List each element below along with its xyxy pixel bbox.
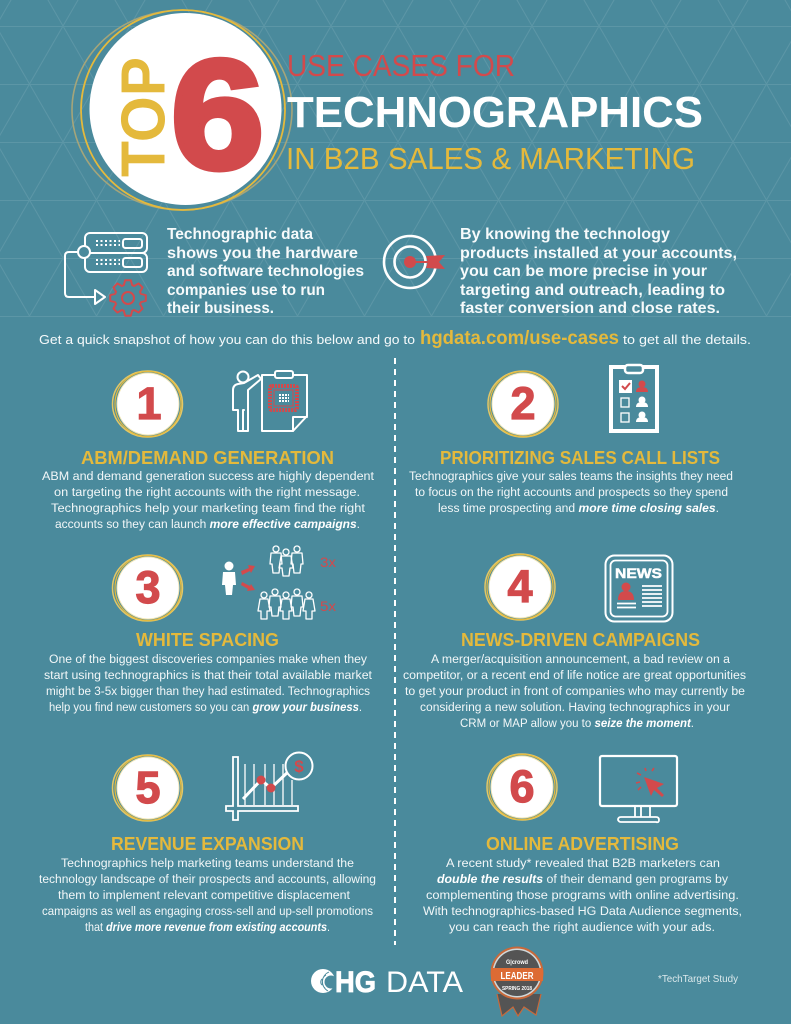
icon: newspaper: NEWS	[615, 565, 662, 581]
title badge: top 6: TOP	[110, 57, 178, 177]
panel: use case 6	[423, 754, 742, 934]
number badge 2: 2	[510, 378, 536, 429]
icon: monitor with cursor	[600, 756, 677, 822]
icon: one person to customer groups: 3x	[320, 554, 336, 570]
logo: HG Data	[311, 966, 463, 999]
number badge 5: 5	[135, 762, 161, 813]
badge: G2 Crowd leader: LEADER	[500, 970, 534, 982]
number badge 2	[488, 371, 558, 437]
number badge 3	[112, 555, 182, 621]
icon: growth chart with dollar	[226, 752, 312, 820]
body text: to get your product in front of companies who may currently be	[405, 684, 745, 698]
heading: REVENUE EXPANSION	[111, 834, 304, 854]
number badge 1	[112, 371, 182, 437]
panel: use case 1	[42, 371, 375, 531]
icon: newspaper	[606, 556, 672, 622]
body text: A merger/acquisition announcement, a bad review on a	[431, 652, 730, 666]
intro text left: companies use to run	[167, 282, 325, 299]
icon: target	[384, 236, 445, 288]
heading: WHITE SPACING	[136, 630, 279, 650]
body text	[39, 856, 376, 934]
intro text right: you can be more precise in your	[460, 263, 707, 280]
body text: on targeting the right accounts with the right message.	[54, 485, 360, 499]
number badge 3: 3	[135, 562, 161, 613]
body text: considering a new solution. Having technographics in your	[420, 700, 730, 714]
title badge: top 6: 6	[171, 28, 264, 201]
body text: Technographics help your marketing team find the right	[51, 501, 366, 515]
body text: double the results of their demand gen programs by	[437, 872, 729, 886]
body text: to focus on the right accounts and prospects so they spend	[415, 485, 728, 499]
panel: use case 3	[44, 546, 373, 714]
snapshot call to action	[39, 328, 751, 349]
intro text right: By knowing the technology	[460, 226, 670, 243]
body text	[403, 652, 746, 730]
heading: ONLINE ADVERTISING	[486, 834, 679, 854]
body text: start using technographics is that their total available market	[44, 668, 373, 682]
intro text left: shows you the hardware	[167, 245, 358, 262]
panel: use case 2	[409, 365, 733, 515]
body text: ABM and demand generation success are highly dependent	[42, 469, 375, 483]
body text: that drive more revenue from existing accounts.	[85, 920, 330, 934]
heading: PRIORITIZING SALES CALL LISTS	[440, 448, 720, 468]
icon: growth chart with dollar: $	[294, 757, 304, 776]
badge: G2 Crowd leader	[490, 946, 544, 1016]
intro text right: products installed at your accounts,	[460, 245, 737, 262]
title text: TECHNOGRAPHICS	[287, 88, 703, 137]
badge: G2 Crowd leader: G|crowd	[506, 960, 528, 966]
icon: clipboard checklist	[611, 365, 657, 431]
snapshot call to action: hgdata.com/use-cases	[420, 328, 619, 349]
intro text right: targeting and outreach, leading to	[460, 282, 725, 299]
heading: ABM/DEMAND GENERATION	[81, 448, 334, 468]
number badge 5	[112, 755, 182, 821]
logo: HG Data: HG	[335, 966, 376, 999]
icon: one person to customer groups	[222, 546, 336, 619]
title badge: top 6	[72, 10, 292, 210]
body text	[423, 856, 742, 934]
body text: competitor, or a recent end of life notice are great opportunities	[403, 668, 746, 682]
snapshot call to action: to get all the details.	[623, 332, 751, 347]
number badge 6	[487, 754, 557, 820]
body text: Technographics help marketing teams understand the	[61, 856, 354, 870]
icon: one person to customer groups: 5x	[320, 598, 336, 614]
heading: NEWS-DRIVEN CAMPAIGNS	[461, 630, 700, 650]
body text: accounts so they can launch more effective campaigns.	[55, 517, 360, 531]
intro text right: faster conversion and close rates.	[460, 300, 720, 317]
number badge 4	[485, 554, 555, 620]
body text	[409, 469, 733, 515]
body text: you can reach the right audience with your ads.	[449, 920, 715, 934]
panel: use case 5	[39, 752, 376, 934]
number badge 6: 6	[509, 761, 535, 812]
intro text right	[460, 226, 737, 317]
number badge 4: 4	[507, 561, 533, 612]
intro text left: and software technologies	[167, 263, 364, 280]
body text: Technographics give your sales teams the insights they need	[409, 469, 733, 483]
body text: might be 3-5x bigger than they had estimated. Technographics	[46, 684, 370, 698]
title text: USE CASES FOR	[287, 48, 515, 83]
body text	[42, 469, 375, 531]
body text: less time prospecting and more time closing sales.	[438, 501, 719, 515]
logo: HG Data: DATA	[386, 966, 463, 999]
body text: them to implement relevant competitive displacement	[58, 888, 351, 902]
intro text left: their business.	[167, 300, 274, 317]
body text	[44, 652, 373, 714]
intro text left	[167, 226, 364, 317]
icon: presenter with chip board	[233, 371, 307, 431]
number badge 1: 1	[136, 378, 162, 429]
title text	[286, 48, 703, 176]
badge: G2 Crowd leader: SPRING 2018	[502, 986, 532, 992]
body text: CRM or MAP allow you to seize the moment.	[460, 716, 694, 730]
title text: IN B2B SALES & MARKETING	[286, 141, 695, 176]
snapshot call to action: Get a quick snapshot of how you can do this below and go to	[39, 332, 415, 347]
body text: help you find new customers so you can grow your business.	[49, 700, 362, 714]
icon: server and gear	[65, 233, 147, 316]
body text: With technographics-based HG Data Audience segments,	[423, 904, 742, 918]
body text: One of the biggest discoveries companies make when they	[49, 652, 368, 666]
footnote: *TechTarget Study	[658, 973, 739, 985]
body text: complementing those programs with online advertising.	[426, 888, 739, 902]
body text: campaigns as well as engaging cross-sell and up-sell promotions	[42, 904, 373, 918]
body text: technology landscape of their prospects and accounts, allowing	[39, 872, 376, 886]
body text: A recent study* revealed that B2B marketers can	[446, 856, 720, 870]
intro text left: Technographic data	[167, 226, 313, 243]
panel: use case 4	[403, 554, 746, 730]
